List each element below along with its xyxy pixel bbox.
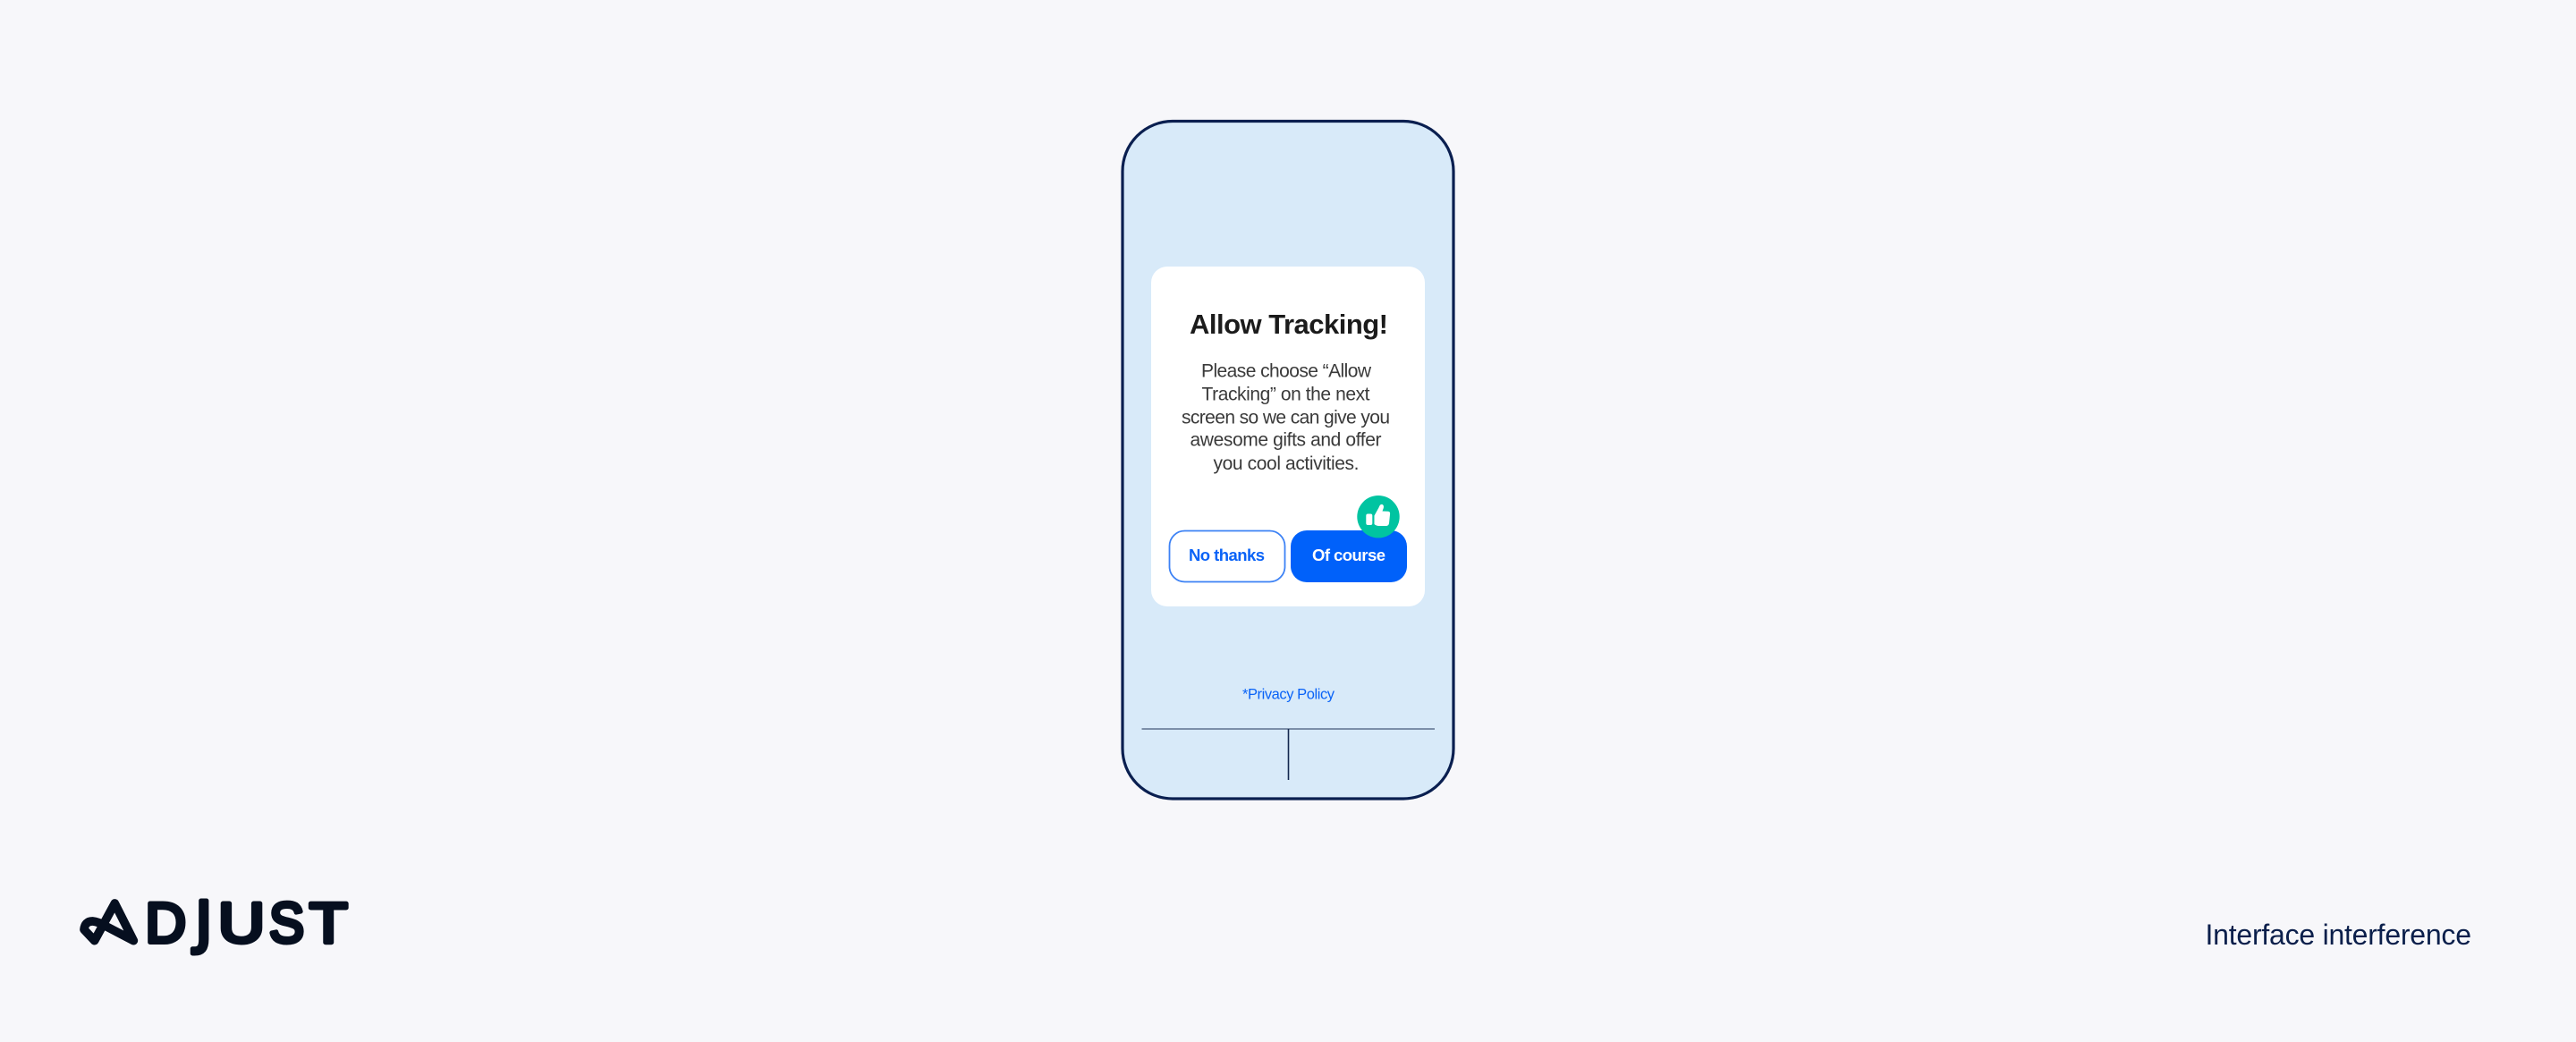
dialog body text: awesome gifts and offer xyxy=(1190,429,1381,451)
icon: Adjust A mark xyxy=(84,903,133,941)
dialog body text: Please choose “Allow xyxy=(1201,361,1372,381)
button: No thanks xyxy=(1170,531,1284,581)
dialog body text: Tracking” on the next xyxy=(1202,385,1370,404)
logo wordmark: J xyxy=(191,891,212,955)
button: Of course xyxy=(1291,530,1407,582)
footer caption: Interface interference xyxy=(2206,919,2471,951)
logo: Adjust xyxy=(84,891,348,955)
icon: thumbs up badge xyxy=(1357,496,1400,538)
dialog body text: you cool activities. xyxy=(1213,453,1360,474)
button: Of course: Of course xyxy=(1312,546,1385,564)
phone mockup xyxy=(1123,122,1453,799)
button: No thanks: No thanks xyxy=(1189,546,1265,564)
phone body xyxy=(1123,122,1453,799)
dialog divider lines xyxy=(1141,729,1435,780)
logo wordmark: T xyxy=(309,893,347,955)
logo wordmark xyxy=(145,891,347,955)
logo wordmark: S xyxy=(269,893,304,955)
logo wordmark: U xyxy=(218,893,265,955)
logo wordmark: D xyxy=(145,893,186,955)
dialog heading: Allow Tracking! xyxy=(1190,309,1388,340)
dialog body text xyxy=(1182,361,1390,474)
panel: consent dialog card xyxy=(1151,267,1425,606)
privacy policy link: *Privacy Policy xyxy=(1242,687,1335,703)
dialog body text: screen so we can give you xyxy=(1182,408,1390,428)
